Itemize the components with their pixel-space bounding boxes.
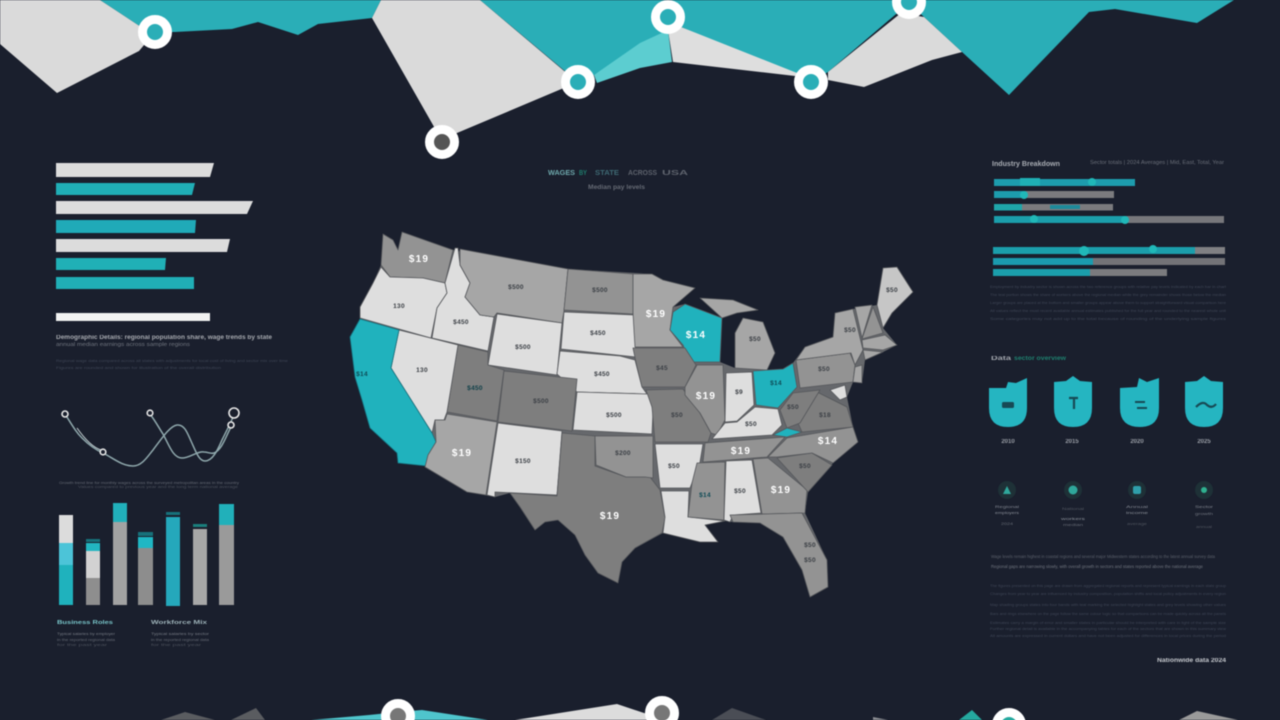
state: Washington	[381, 232, 453, 283]
node: bottom ring 1	[386, 704, 410, 720]
text block: industry notes: Employment by industry sector is shown across the two reference groups with relative pay levels indicated by each bar in chart	[990, 284, 1227, 289]
line chart caption: Growth trend line for monthly wages across the surveyed metropolitan areas in the country	[59, 480, 239, 485]
state: California	[350, 319, 436, 466]
state: Michigan lower	[735, 318, 775, 370]
map value labels: $19	[696, 391, 716, 402]
map value labels: $50	[734, 488, 746, 495]
small icon column 1: employers	[995, 510, 1019, 515]
icon: shield 1	[989, 378, 1027, 427]
map value labels: $19	[600, 511, 620, 522]
progress bars: industry breakdown	[993, 178, 1225, 276]
text block: industry notes	[990, 284, 1227, 321]
heading: sector data	[991, 356, 1066, 362]
state: Mississippi	[688, 462, 725, 520]
map value labels: $50	[787, 404, 799, 411]
map value labels: $500	[533, 398, 549, 405]
icon: shield 4	[1185, 376, 1223, 427]
footer source note: Nationwide data 2024	[1157, 658, 1227, 664]
shield captions	[1001, 439, 1211, 445]
state: West Virginia	[780, 390, 820, 428]
state: Arizona	[425, 414, 497, 495]
state: Kentucky	[712, 407, 782, 439]
text block: demographic details: Figures are rounded and shown for illustration of the overall distribution	[56, 365, 221, 370]
state: Tennessee	[703, 437, 785, 462]
map value labels: $14	[686, 330, 706, 341]
heading: sector data: Data	[991, 356, 1012, 362]
shield captions: 2020	[1130, 439, 1144, 445]
map value labels: $500	[606, 412, 622, 419]
map value labels: $450	[467, 385, 483, 392]
node: bottom ring 2	[650, 700, 674, 720]
map value labels: $150	[515, 458, 531, 465]
map value labels: $50	[804, 542, 816, 549]
text block: methodology notes: Map shading groups states into four bands with teal marking the selected highlight states and grey levels showing other values	[990, 602, 1226, 607]
map title: USA	[662, 170, 688, 177]
node: bottom ring 3	[996, 712, 1022, 720]
map title: BY	[579, 170, 587, 177]
text block: demographic details: Regional wage data compared across all states with adjustments for local cost of living and sector mix over time	[56, 358, 289, 363]
land silhouette beneath the states	[350, 232, 913, 597]
map value labels: $50	[799, 463, 811, 470]
map value labels: $18	[819, 412, 831, 419]
node: top ring 2	[430, 130, 454, 154]
bar chart captions: Typical salaries by sector	[151, 631, 210, 636]
node: top ring 3	[566, 70, 590, 94]
map value labels: $9	[735, 389, 743, 396]
state: Kansas	[573, 392, 653, 434]
small icon column 4: growth	[1195, 511, 1213, 516]
stacked bar chart	[59, 503, 234, 606]
text block: highlighted summary: Regional gaps are narrowing slowly, with overall growth in sectors and states reported above the national average	[991, 564, 1203, 569]
small icon column 4: Sector	[1195, 504, 1214, 509]
state: Oklahoma	[595, 436, 653, 478]
bar 7	[219, 504, 234, 605]
small icon column 3: income	[1126, 510, 1149, 515]
state: Louisiana	[661, 491, 725, 542]
bar chart captions	[57, 620, 210, 647]
state: Utah	[447, 345, 504, 421]
map value labels: $19	[731, 446, 751, 457]
panel: industry breakdown heading	[992, 160, 1224, 168]
small icon column 4: annual	[1196, 524, 1212, 529]
map value labels	[356, 254, 898, 564]
state: New Jersey	[853, 365, 862, 383]
text block: methodology notes: Bars and rings elsewhere on the page follow the same colour logic so that comparisons can be made quickly across all the panels	[990, 611, 1226, 616]
state: Indiana	[725, 372, 754, 422]
state: North Carolina	[768, 427, 858, 463]
node: top ring 6	[896, 0, 922, 14]
map value labels: 130	[393, 303, 405, 310]
text block: demographic details: annual median earnings across sample regions	[56, 342, 191, 348]
state: highlighted sliver	[773, 428, 802, 437]
map value labels: $50	[818, 366, 830, 373]
small icon column 2: workers	[1061, 516, 1085, 521]
small icon column 4	[1195, 481, 1214, 529]
state: Massachusetts	[862, 335, 897, 350]
map value labels: $50	[668, 463, 680, 470]
map value labels: $50	[886, 287, 898, 294]
bar 2	[86, 539, 100, 605]
text block: highlighted summary	[991, 554, 1215, 569]
text block: demographic details	[56, 335, 289, 370]
state: Arkansas	[655, 444, 703, 488]
bar chart captions: for the past year	[151, 642, 202, 647]
map value labels: $500	[592, 287, 608, 294]
map value labels: $14	[356, 371, 368, 378]
map value labels: $14	[699, 492, 711, 499]
map value labels: $50	[804, 557, 816, 564]
small icon column 3: average	[1127, 521, 1148, 526]
line chart markers	[62, 408, 239, 455]
panel: industry breakdown heading: Sector totals | 2024 Averages | Mid, East, Total, Year	[1090, 160, 1224, 166]
map value labels: $14	[818, 436, 838, 447]
map value labels: $50	[749, 336, 761, 343]
node: top ring 4	[656, 4, 680, 30]
small icon column 2	[1061, 481, 1085, 527]
line chart caption: Values compared to previous year and the long term national average	[78, 485, 238, 489]
map value labels: $14	[770, 380, 782, 387]
bar chart captions: in the reported regional data	[151, 637, 210, 642]
text block: highlighted summary: Wage levels remain highest in coastal regions and several major Midwestern states according to the latest annual survey data	[991, 554, 1215, 559]
map value labels: $450	[594, 371, 610, 378]
state: Missouri	[646, 389, 711, 442]
small icon column 2: median	[1063, 522, 1083, 527]
map title	[548, 170, 688, 191]
map value labels: $19	[646, 309, 666, 320]
bar 4	[138, 532, 153, 605]
icon: shield 3	[1120, 378, 1159, 427]
state: Iowa	[633, 348, 696, 387]
shield captions: 2010	[1001, 439, 1015, 445]
bar 1	[59, 515, 73, 605]
map value labels: $50	[745, 421, 757, 428]
small icon column 1	[995, 481, 1019, 526]
state: Illinois	[685, 365, 725, 435]
bar chart captions: in the reported regional data	[57, 637, 116, 642]
state: Maryland and Delaware	[830, 385, 847, 400]
bottom decorative ribbon	[161, 700, 1238, 720]
text block: demographic details: Demographic Details: regional population share, wage trends by state	[56, 335, 273, 341]
state: South Dakota	[561, 312, 636, 357]
bar chart captions: Typical salaries by employer	[57, 631, 116, 636]
node: top ring 5	[798, 70, 824, 94]
state: Minnesota	[633, 274, 695, 347]
map title: STATE	[595, 170, 619, 177]
state: Pennsylvania	[796, 353, 855, 388]
small icon column 3	[1126, 481, 1149, 526]
state: New Hampshire	[862, 307, 883, 339]
small icon column 2: National	[1062, 506, 1084, 511]
top decorative ribbon	[0, 0, 1234, 154]
small icon column 1: Regional	[995, 504, 1019, 509]
map value labels: $500	[515, 344, 531, 351]
map value labels: $50	[844, 327, 856, 334]
text block: industry notes: Larger groups are placed at the bottom and smaller groups appear above them to support straightforward visual comparison here	[990, 300, 1227, 305]
map value labels: $200	[615, 450, 631, 457]
map value labels: $450	[590, 330, 606, 337]
bar chart captions: Business Roles	[57, 620, 113, 626]
map title: Median pay levels	[588, 185, 646, 191]
state: Oregon	[360, 267, 447, 338]
map title: WAGES	[548, 170, 575, 177]
text block: industry notes: Some categories may not add up to the total because of rounding of the underlying sample figures	[990, 316, 1226, 321]
panel: industry breakdown heading: Industry Breakdown	[992, 161, 1060, 168]
state: Idaho	[432, 248, 494, 351]
text block: methodology notes: Estimates carry a margin of error and smaller states in particular should be interpreted with care in light of the sample size	[990, 620, 1227, 625]
bar 5	[166, 512, 180, 606]
icon: shield 2	[1054, 376, 1092, 427]
map value labels: $450	[453, 319, 469, 326]
state: Montana	[460, 249, 568, 323]
map value labels: $19	[771, 485, 791, 496]
map value labels: $45	[656, 365, 668, 372]
text block: methodology notes: The figures presented on this page are drawn from aggregated regional reports and represent typical earnings in each state group	[990, 583, 1227, 588]
state: Georgia	[753, 458, 807, 514]
state: Florida	[730, 513, 828, 597]
state: Ohio	[753, 363, 797, 408]
bar markers	[1020, 178, 1157, 256]
state: South Carolina	[777, 453, 832, 492]
text block: methodology notes	[990, 583, 1227, 638]
state: Nevada	[391, 330, 458, 433]
map value labels: 130	[416, 367, 428, 374]
state: Virginia	[798, 392, 853, 432]
small icon column 3: Annual	[1126, 504, 1148, 509]
shield captions: 2025	[1197, 439, 1211, 445]
small icon column 1: 2024	[1001, 521, 1014, 526]
text block: industry notes: The teal portion shows the share of workers above the regional median while the grey remainder shows those below the median	[990, 292, 1226, 297]
state: Vermont	[855, 305, 872, 338]
map value labels: $500	[508, 284, 524, 291]
state: Maine	[877, 267, 913, 328]
bar chart captions: for the past year	[57, 642, 108, 647]
line chart	[62, 408, 239, 466]
map value labels: $19	[452, 448, 472, 459]
text block: industry notes: All values reflect the most recent available annual estimates published for the full year and rounded to the nearest whole unit	[990, 308, 1227, 313]
state: Colorado	[498, 371, 577, 431]
shield captions: 2015	[1065, 439, 1079, 445]
text block: methodology notes: Changes from year to year are influenced by industry composition, population shifts and local policy adjustments in every region	[990, 591, 1226, 596]
state: Alabama	[724, 460, 761, 522]
node: top ring 1	[142, 20, 168, 44]
map value labels: $19	[409, 254, 429, 265]
state: Michigan upper	[700, 298, 758, 318]
map value labels: $50	[671, 412, 683, 419]
state: Connecticut and Rhode Island	[863, 350, 883, 360]
choropleth map of the United States	[350, 232, 913, 597]
text block: methodology notes: All amounts are expressed in current dollars and have not been adjusted for differences in local prices during the period	[990, 633, 1226, 638]
heading: sector data: sector overview	[1014, 356, 1066, 362]
state: New York	[796, 309, 863, 365]
state: New Mexico	[487, 423, 562, 497]
text block: methodology notes: Further regional detail is available in the accompanying tables for each of the sectors that are shown in this summary view	[990, 626, 1226, 631]
panel: horizontal bars left	[56, 163, 253, 321]
bar chart captions: Workforce Mix	[151, 620, 208, 626]
bar 3	[113, 503, 127, 605]
state: North Dakota	[564, 269, 633, 314]
state: Texas	[510, 433, 665, 583]
line chart caption	[59, 480, 239, 489]
bar 6	[193, 524, 207, 605]
state: Wisconsin	[670, 304, 722, 362]
state: Wyoming	[488, 314, 562, 375]
map title: ACROSS	[628, 170, 657, 177]
state: Nebraska	[557, 351, 647, 394]
